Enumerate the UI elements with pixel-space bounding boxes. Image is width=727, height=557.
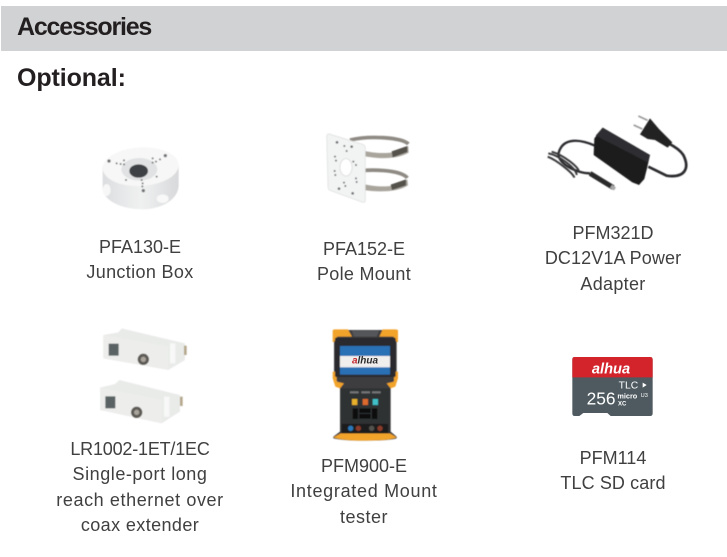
icon: power adapter (548, 116, 686, 189)
icon: TLC SD card: alhua (592, 362, 630, 378)
caption: PFM114: TLC SD card (560, 473, 666, 493)
caption: PFM900-E: tester (340, 507, 388, 527)
caption: PFA152-E: PFA152-E (323, 239, 405, 259)
caption: PFM114 (560, 448, 666, 493)
caption: PFM321D (545, 223, 681, 294)
caption: PFM321D: Adapter (580, 274, 646, 294)
caption: PFM900-E: PFM900-E (321, 456, 407, 476)
caption: LR1002-1ET/1EC: LR1002-1ET/1EC (70, 439, 210, 459)
icon: TLC SD card: TLC (619, 380, 639, 391)
caption: LR1002-1ET/1EC: Single-port long (73, 464, 207, 484)
icon: junction box (102, 145, 180, 209)
icon: TLC SD card (572, 357, 653, 416)
icon: integrated mount tester: alhua (352, 355, 378, 366)
caption: PFA130-E: Junction Box (86, 262, 194, 282)
caption: PFA130-E: PFA130-E (99, 237, 181, 257)
caption: PFM321D: PFM321D (572, 223, 654, 243)
caption: PFA152-E: Pole Mount (317, 264, 411, 284)
caption: PFA130-E (86, 237, 194, 282)
icon: integrated mount tester (333, 329, 398, 441)
caption: PFA152-E (317, 239, 411, 284)
icon: TLC SD card: micro (617, 391, 638, 400)
icon: TLC SD card: U3 (641, 393, 648, 399)
icon: TLC SD card: XC (618, 402, 627, 408)
caption: PFM900-E: Integrated Mount (290, 481, 438, 501)
caption: LR1002-1ET/1EC: coax extender (81, 515, 199, 535)
bottom extender (100, 380, 183, 423)
icon: pole mount (327, 134, 409, 202)
top extender (103, 328, 187, 370)
caption: PFM114: PFM114 (580, 448, 646, 468)
caption: LR1002-1ET/1EC (56, 439, 224, 535)
title: Accessories (17, 13, 151, 41)
subheading: Optional: (17, 64, 126, 92)
caption: PFM321D: DC12V1A Power (545, 248, 681, 268)
icon: ethernet over coax extenders (100, 328, 187, 423)
caption: LR1002-1ET/1EC: reach ethernet over (56, 490, 224, 510)
icon: TLC SD card: 256 (587, 389, 616, 409)
header bar (1, 6, 727, 51)
caption: PFM900-E (290, 456, 438, 527)
